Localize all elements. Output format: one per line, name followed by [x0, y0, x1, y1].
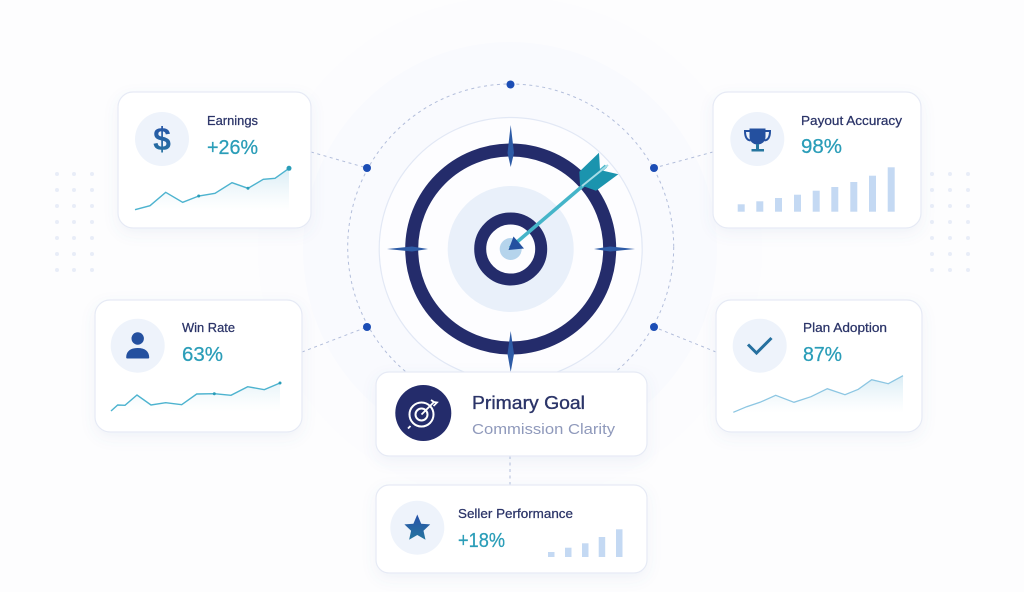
- bullseye: [500, 238, 522, 260]
- dot grid right: [930, 172, 970, 272]
- label: Seller Performance: [458, 507, 573, 521]
- icon: dollar: [135, 112, 189, 166]
- value: 87%: [803, 344, 842, 366]
- icon: trophy: [730, 112, 784, 166]
- card: Payout Accuracy: [713, 92, 921, 228]
- card: Plan Adoption: [716, 300, 922, 432]
- value: +26%: [207, 137, 258, 159]
- bar chart: [738, 167, 895, 212]
- card: Seller Performance: [376, 485, 647, 573]
- dot grid left: [55, 172, 94, 272]
- label: Earnings: [207, 114, 258, 128]
- value: 63%: [182, 344, 223, 366]
- icon: star: [390, 501, 444, 555]
- connector nodes: [363, 80, 658, 331]
- sparkline: [135, 166, 292, 211]
- label: Plan Adoption: [803, 321, 887, 335]
- heading: Primary Goal: [472, 393, 585, 413]
- label: Payout Accuracy: [801, 114, 903, 128]
- icon: dollar: $: [153, 121, 171, 157]
- icon: check: [733, 319, 787, 373]
- dashed orbit and connectors: [302, 84, 716, 485]
- label: Win Rate: [182, 321, 235, 335]
- value: +18%: [458, 530, 505, 552]
- target: [379, 118, 642, 380]
- area chart: [733, 376, 903, 413]
- bar chart: [548, 529, 622, 557]
- compass spikes: [387, 125, 635, 372]
- outer ring: [412, 150, 610, 348]
- inner ring: [480, 218, 541, 280]
- card: Win Rate: [95, 300, 302, 432]
- halo circles: [258, 0, 762, 501]
- value: 98%: [801, 136, 842, 158]
- icon: person: [111, 319, 165, 373]
- card: Earnings: [118, 92, 311, 228]
- card: Primary Goal: [376, 372, 647, 456]
- target plate: [379, 118, 642, 380]
- arrow: [508, 153, 618, 250]
- subheading: Commission Clarity: [472, 421, 616, 438]
- sparkline: [111, 382, 282, 412]
- icon: dart target: [395, 385, 451, 441]
- pale disc: [448, 186, 574, 312]
